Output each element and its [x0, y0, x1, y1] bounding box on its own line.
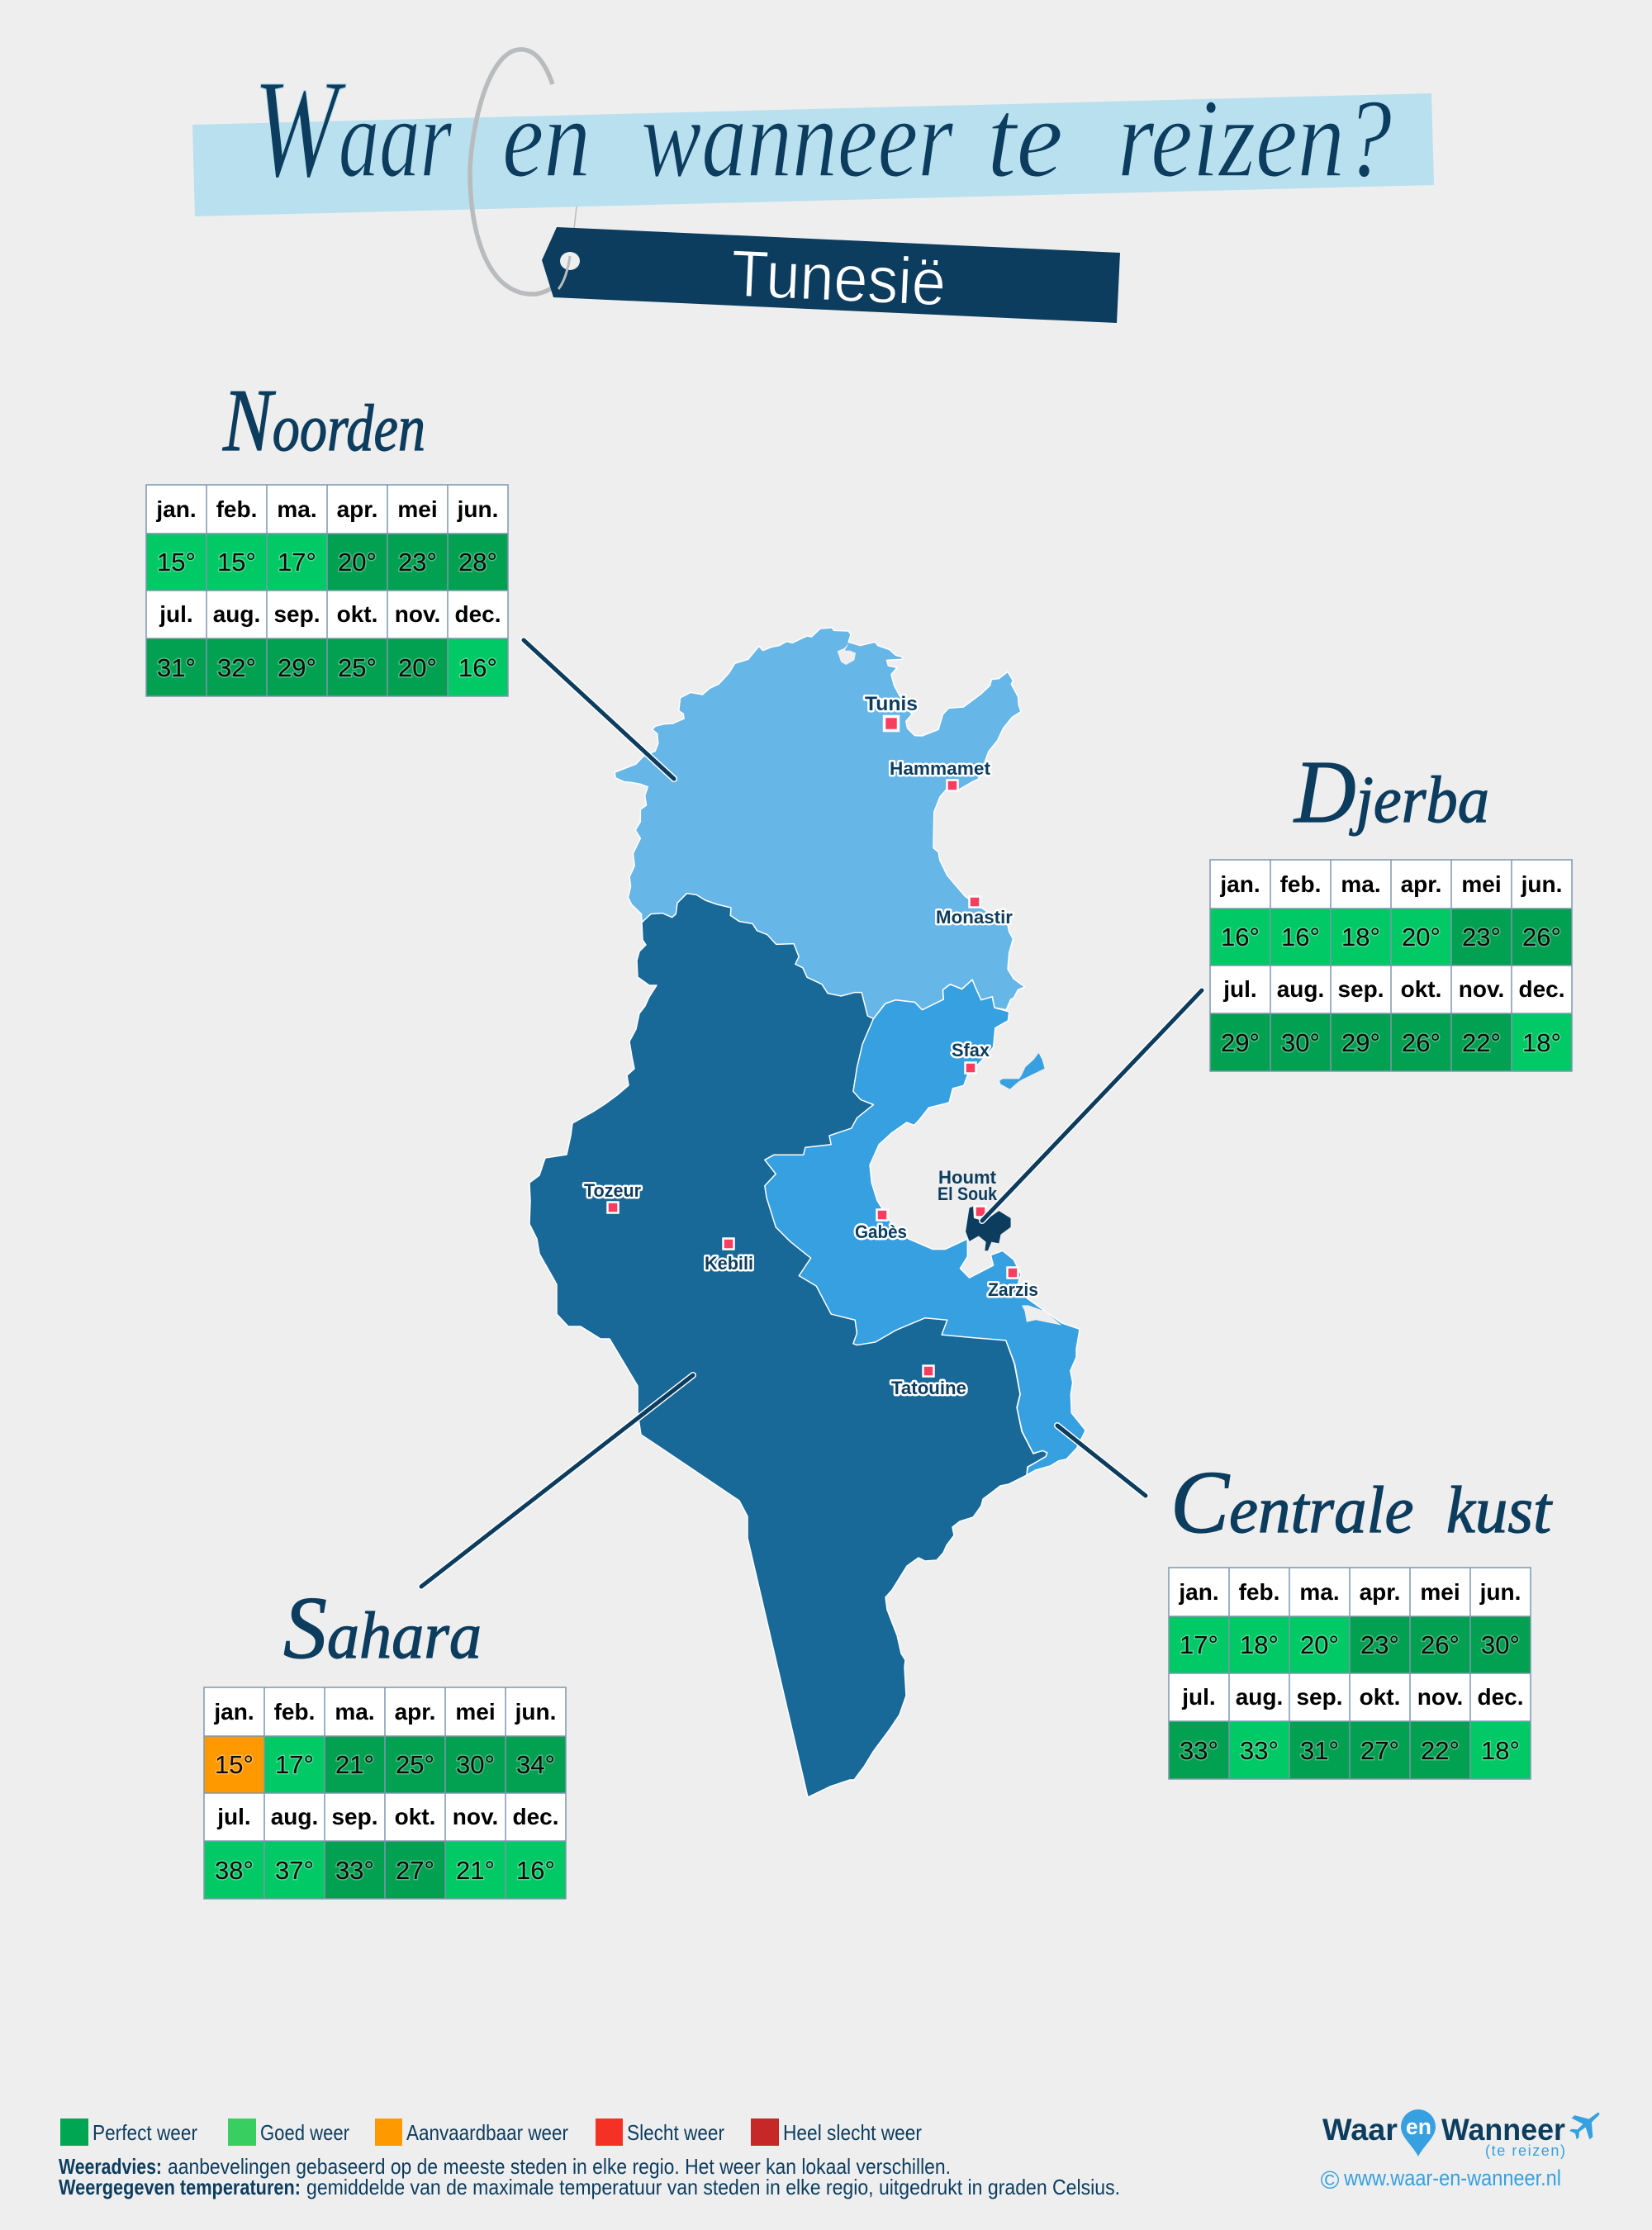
climate table: Noorden: 29°: [278, 653, 316, 682]
climate table: Sahara: 15°: [215, 1750, 254, 1779]
city: Gabès: [855, 1209, 907, 1242]
city: Houmt El Souk: El Souk: [938, 1184, 998, 1204]
country tag: [542, 227, 1120, 323]
climate table: Sahara: 38°: [215, 1856, 254, 1885]
climate table: Djerba: ma.: [1341, 871, 1381, 897]
city: Tozeur: [584, 1180, 641, 1212]
climate table: Noorden: mei: [397, 496, 438, 522]
climate table: Sahara: 21°: [335, 1750, 374, 1779]
city: Hammamet: Hammamet: [890, 758, 991, 779]
climate table: Centrale kust: apr.: [1360, 1579, 1400, 1605]
climate table: Sahara: 33°: [335, 1856, 374, 1885]
climate table: Centrale kust: okt.: [1360, 1684, 1400, 1710]
city: Tatouine: [891, 1366, 966, 1398]
climate table: Sahara: aug.: [271, 1804, 318, 1829]
city: Kebili: [705, 1239, 753, 1274]
title block: [192, 50, 1434, 323]
climate table: Sahara: sep.: [331, 1804, 378, 1829]
panel: Sahara: [204, 1579, 566, 1899]
city: Tatouine: Tatouine: [891, 1378, 966, 1398]
climate table: Noorden: 17°: [278, 548, 316, 576]
climate table: Noorden: okt.: [337, 601, 377, 627]
climate table: Djerba: 30°: [1281, 1028, 1320, 1057]
climate table: Noorden: dec.: [454, 601, 501, 627]
climate table: Noorden: sep.: [273, 601, 320, 627]
legend item: Goed weer: Goed weer: [260, 2120, 349, 2145]
climate table: Noorden: 15°: [157, 548, 196, 576]
climate table: Djerba: nov.: [1459, 976, 1504, 1002]
climate table: Djerba: 26°: [1402, 1028, 1441, 1057]
climate table: Djerba: 29°: [1341, 1028, 1380, 1057]
panel: Centrale kust: [1169, 1454, 1553, 1779]
climate table: Centrale kust: 33°: [1240, 1736, 1279, 1765]
climate table: Sahara: [204, 1687, 566, 1899]
legend item: Perfect weer: [60, 2118, 197, 2146]
climate table: Centrale kust: dec.: [1477, 1684, 1524, 1710]
city: Tunis: [865, 693, 918, 730]
website url: [1321, 2166, 1561, 2194]
leader line: Djerba: [982, 990, 1202, 1221]
climate table: Sahara: okt.: [395, 1804, 435, 1829]
title text: te: [987, 77, 1063, 201]
climate table: Djerba: mei: [1461, 871, 1502, 897]
climate table: Noorden: feb.: [216, 496, 257, 522]
region: Kerkennah islands: [999, 1053, 1045, 1089]
climate table: Sahara: dec.: [512, 1804, 559, 1829]
climate table: Djerba: feb.: [1280, 871, 1321, 897]
climate table: Sahara: 17°: [275, 1750, 314, 1779]
logo wordmark: Waar: [1322, 2113, 1398, 2147]
city: Sfax: [952, 1040, 990, 1074]
climate table: Djerba: 26°: [1522, 923, 1561, 951]
region: Djerba: [966, 1207, 1011, 1250]
footnote text: [59, 2154, 1120, 2199]
city: Sfax: Sfax: [952, 1040, 990, 1060]
city: Houmt El Souk: [938, 1167, 998, 1217]
leader line: Centrale kust: [1057, 1426, 1146, 1496]
heading: Noorden: Noorden: [222, 372, 425, 470]
climate table: Centrale kust: 26°: [1421, 1630, 1460, 1659]
tag string loop: [470, 50, 577, 294]
climate table: Djerba: 18°: [1341, 923, 1380, 951]
country tag: Tunesië: [729, 236, 947, 320]
climate table: Djerba: apr.: [1401, 871, 1441, 897]
climate table: Djerba: okt.: [1401, 976, 1441, 1002]
city: Monastir: [936, 897, 1013, 928]
climate table: Djerba: jan.: [1219, 871, 1260, 897]
legend item: Slecht weer: [596, 2118, 724, 2146]
climate table: Djerba: 23°: [1462, 923, 1501, 951]
icon: airplane: [1564, 2102, 1608, 2146]
climate table: Centrale kust: 23°: [1360, 1630, 1399, 1659]
website url: www.waar-en-wanneer.nl: [1343, 2166, 1561, 2190]
logo wordmark: [1322, 2113, 1565, 2147]
climate table: Noorden: 20°: [338, 548, 377, 576]
legend item: Slecht weer: Slecht weer: [627, 2120, 724, 2145]
footnote text: aanbevelingen gebaseerd op de meeste steden in elke regio. Het weer kan lokaal verschillen.: [168, 2154, 951, 2179]
climate table: Sahara: nov.: [453, 1804, 498, 1829]
footnote text: gemiddelde van de maximale temperatuur van steden in elke regio, uitgedrukt in graden Celsius.: [306, 2175, 1120, 2199]
climate table: Centrale kust: feb.: [1239, 1579, 1279, 1605]
legend item: Goed weer: [228, 2118, 349, 2146]
legend item: Heel slecht weer: [751, 2118, 922, 2146]
climate table: Noorden: apr.: [337, 496, 377, 522]
climate table: Noorden: aug.: [213, 601, 260, 627]
title text: Waar: [254, 51, 453, 206]
climate table: Centrale kust: ma.: [1299, 1579, 1340, 1605]
heading: Djerba: Djerba: [1293, 743, 1489, 842]
map of Tunisia: [529, 628, 1085, 1797]
climate table: Centrale kust: 20°: [1300, 1630, 1339, 1659]
title text: en: [502, 77, 591, 201]
legend: [60, 2118, 922, 2146]
climate table: Noorden: 15°: [217, 548, 256, 576]
climate table: Centrale kust: 30°: [1481, 1630, 1520, 1659]
climate table: Noorden: jun.: [457, 496, 498, 522]
legend item: Aanvaardbaar weer: Aanvaardbaar weer: [406, 2120, 568, 2145]
lake Bizerte: [838, 643, 856, 665]
climate table: Djerba: aug.: [1277, 976, 1324, 1002]
title text: [254, 51, 1392, 206]
climate table: Centrale kust: aug.: [1236, 1684, 1283, 1710]
climate table: Centrale kust: 18°: [1481, 1736, 1520, 1765]
climate table: Djerba: 18°: [1522, 1028, 1561, 1057]
climate table: Djerba: 20°: [1402, 923, 1441, 951]
logo wordmark: Wanneer: [1441, 2113, 1565, 2147]
climate table: Sahara: ma.: [335, 1699, 375, 1725]
city: Hammamet: [890, 758, 991, 791]
climate table: Noorden: [146, 485, 508, 696]
climate table: Djerba: 16°: [1281, 923, 1320, 951]
climate table: Sahara: 21°: [456, 1856, 495, 1885]
climate table: Noorden: 20°: [398, 653, 437, 682]
legend item: Aanvaardbaar weer: [375, 2118, 568, 2146]
lagoon: Bahiret el Bibane: [1022, 1305, 1061, 1326]
climate table: Sahara: 16°: [516, 1856, 555, 1885]
climate table: Centrale kust: 22°: [1421, 1736, 1460, 1765]
climate table: Djerba: dec.: [1518, 976, 1565, 1002]
climate table: Djerba: sep.: [1337, 976, 1384, 1002]
city: Tozeur: Tozeur: [584, 1180, 641, 1201]
climate table: Centrale kust: 18°: [1240, 1630, 1279, 1659]
city: Zarzis: Zarzis: [988, 1279, 1038, 1300]
city: Kebili: Kebili: [705, 1253, 753, 1274]
climate table: Sahara: 25°: [396, 1750, 434, 1779]
city: Gabès: Gabès: [855, 1222, 907, 1242]
climate table: Sahara: 37°: [275, 1856, 314, 1885]
climate table: Noorden: 31°: [157, 653, 196, 682]
city: Zarzis: [988, 1267, 1038, 1300]
climate table: Noorden: nov.: [395, 601, 440, 627]
footnote text: Weeradvies:: [59, 2154, 162, 2179]
climate table: Sahara: feb.: [274, 1699, 315, 1725]
climate table: Centrale kust: nov.: [1417, 1684, 1463, 1710]
climate table: Djerba: jun.: [1521, 871, 1562, 897]
heading: Sahara: Sahara: [283, 1579, 482, 1677]
legend item: Perfect weer: Perfect weer: [93, 2120, 197, 2145]
region: Sahara: [529, 875, 1047, 1797]
icon: map pin: en: [1406, 2114, 1431, 2139]
climate table: Sahara: 34°: [516, 1750, 555, 1779]
leader line: Sahara: [421, 1375, 693, 1587]
climate table: Sahara: jun.: [515, 1699, 556, 1725]
climate table: Centrale kust: jul.: [1181, 1684, 1216, 1710]
title band: [192, 93, 1434, 216]
climate table: Centrale kust: 27°: [1360, 1736, 1399, 1765]
region: Centrale kust: [765, 980, 1085, 1475]
title text: wanneer: [641, 77, 954, 201]
climate table: Djerba: 22°: [1462, 1028, 1501, 1057]
legend item: Heel slecht weer: Heel slecht weer: [783, 2120, 922, 2145]
climate table: Centrale kust: sep.: [1296, 1684, 1343, 1710]
climate table: Sahara: mei: [455, 1699, 496, 1725]
leader line: Noorden: [524, 640, 674, 779]
climate table: Sahara: jul.: [216, 1804, 251, 1829]
climate table: Centrale kust: jun.: [1479, 1579, 1521, 1605]
panel: Noorden: [146, 372, 508, 696]
climate table: Djerba: [1210, 860, 1572, 1071]
website url: ©: [1321, 2166, 1340, 2194]
panel: Djerba: [1210, 743, 1572, 1071]
climate table: Centrale kust: 33°: [1180, 1736, 1218, 1765]
climate table: Noorden: 16°: [458, 653, 497, 682]
city: Houmt El Souk: Houmt: [938, 1167, 997, 1188]
logo: Waar en Wanneer: [1321, 2102, 1608, 2194]
climate table: Noorden: 23°: [398, 548, 437, 576]
climate table: Sahara: apr.: [395, 1699, 435, 1725]
climate table: Djerba: jul.: [1222, 976, 1257, 1002]
title text: reizen?: [1118, 77, 1392, 201]
city: Monastir: Monastir: [936, 907, 1013, 928]
climate table: Noorden: jan.: [155, 496, 197, 522]
climate table: Centrale kust: mei: [1420, 1579, 1460, 1605]
icon: map pin: [1401, 2109, 1436, 2156]
logo tagline: (te reizen): [1485, 2142, 1565, 2159]
climate table: Centrale kust: 17°: [1180, 1630, 1218, 1659]
climate table: Noorden: 28°: [458, 548, 497, 576]
climate table: Noorden: ma.: [277, 496, 317, 522]
climate table: Noorden: 32°: [217, 653, 256, 682]
climate table: Sahara: jan.: [213, 1699, 254, 1725]
climate table: Centrale kust: 31°: [1300, 1736, 1339, 1765]
heading: Centrale kust: Centrale kust: [1170, 1454, 1553, 1552]
climate table: Sahara: 30°: [456, 1750, 495, 1779]
climate table: Noorden: jul.: [159, 601, 193, 627]
city: Tunis: Tunis: [865, 693, 918, 715]
climate table: Djerba: 29°: [1221, 1028, 1260, 1057]
climate table: Centrale kust: jan.: [1178, 1579, 1219, 1605]
climate table: Djerba: 16°: [1221, 923, 1260, 951]
footnote text: Weergegeven temperaturen:: [59, 2175, 301, 2199]
region: Noorden: [615, 628, 1025, 1018]
climate table: Centrale kust: [1169, 1568, 1531, 1779]
climate table: Noorden: 25°: [338, 653, 377, 682]
climate table: Sahara: 27°: [396, 1856, 434, 1885]
